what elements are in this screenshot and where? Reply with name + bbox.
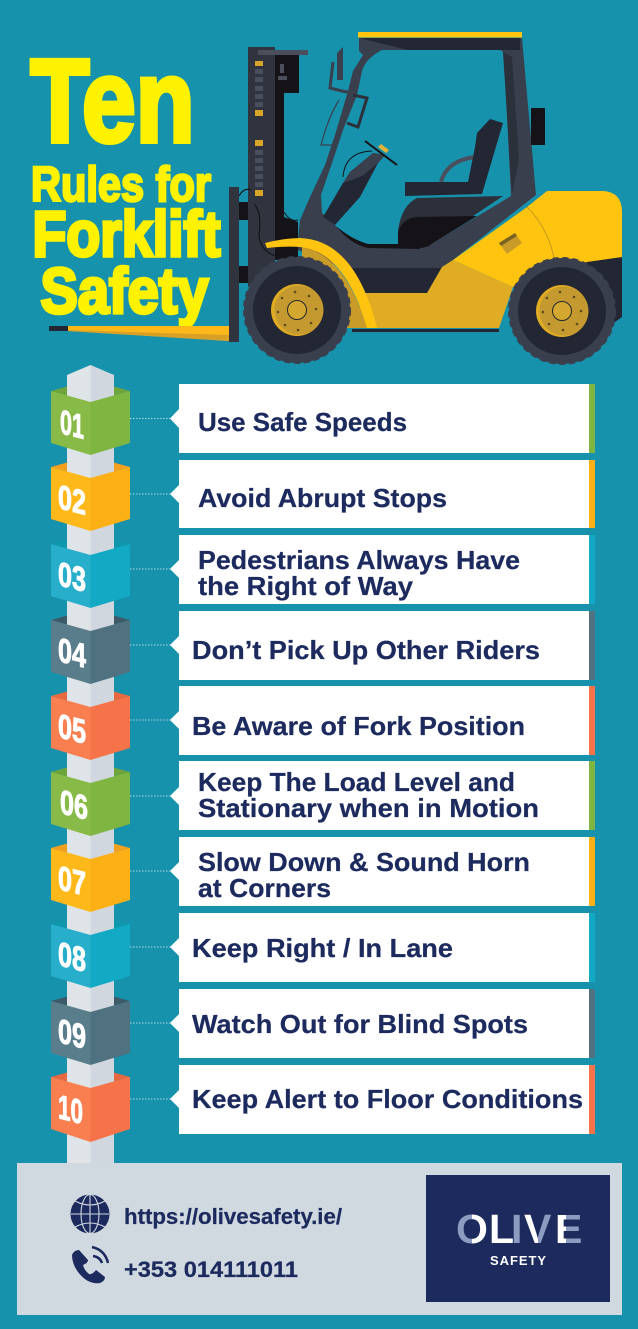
cube 03 [51,544,130,608]
cube 10 [51,1077,130,1142]
cube 01: 01 [60,403,84,447]
title: Ten [30,36,194,168]
title: Forklift [32,198,220,270]
forklift steering column [323,141,397,225]
cube 07 [51,848,130,912]
rule 03 card: Pedestrians Always Have [198,545,520,575]
column post [67,365,114,1163]
cube 01 [51,391,130,455]
rule 03 card: the Right of Way [198,571,414,601]
title: Rules for [31,158,211,212]
forklift cab frame [298,32,545,293]
rule 10 card: Keep Alert to Floor Conditions [192,1084,583,1114]
logo: Olive Safety: OLIVE [456,1206,582,1252]
cube 03: 03 [58,555,86,600]
rule 04 card [130,611,595,680]
cube 10: 10 [58,1088,83,1132]
rule 06 card: Stationary when in Motion [198,793,539,823]
rule 07 card: at Corners [198,873,331,903]
phone number text: +353 014111011 [124,1257,298,1282]
icon: phone [72,1247,108,1283]
rule 06 card: Keep The Load Level and [198,767,515,797]
cube 08 [51,924,130,988]
rule 02 card: Avoid Abrupt Stops [198,483,447,513]
forklift mirrors and handle [321,47,367,145]
cube 06: 06 [60,783,88,828]
cube 02 [51,467,130,531]
footer panel [17,1163,622,1315]
cube 06 [51,772,130,836]
rule 01 card [130,384,595,453]
illustration: forklift [49,32,622,364]
icon: globe [70,1194,110,1234]
rule 07 card [130,837,595,906]
cube 05 [51,696,130,760]
rule 05 card [130,686,595,755]
forklift mast [239,47,308,287]
rule 08 card [130,913,595,982]
forklift front wheel [244,257,350,363]
rule 09 card: Watch Out for Blind Spots [192,1009,528,1039]
cube 08: 08 [58,935,86,980]
forklift rear wheel [509,258,615,364]
rule 02 card [130,460,595,528]
rule 06 card [130,761,595,830]
rule 09 card [130,989,595,1058]
rule 05 card: Be Aware of Fork Position [192,711,525,741]
cube 09: 09 [58,1012,86,1057]
website text: https://olivesafety.ie/ [124,1204,342,1229]
forklift carriage and fork [49,187,248,342]
logo: Olive Safety [426,1175,610,1302]
title: Safety [40,255,209,327]
forklift body [265,191,622,335]
rule 10 card [130,1065,595,1134]
numbered cube column [51,365,130,1163]
cube 05: 05 [58,707,86,752]
title [30,36,220,327]
cube 02: 02 [58,478,86,523]
cube 04: 04 [58,631,87,676]
cube 07: 07 [58,859,86,904]
rule 08 card: Keep Right / In Lane [192,933,453,963]
rule 07 card: Slow Down & Sound Horn [198,847,530,877]
cube 04 [51,620,130,684]
rule 04 card: Don’t Pick Up Other Riders [192,635,540,665]
rule 01 card: Use Safe Speeds [198,407,407,437]
logo: Olive Safety: SAFETY [490,1253,546,1268]
rule 03 card [130,535,595,604]
cube 09 [51,1001,130,1065]
forklift seat [398,119,503,248]
